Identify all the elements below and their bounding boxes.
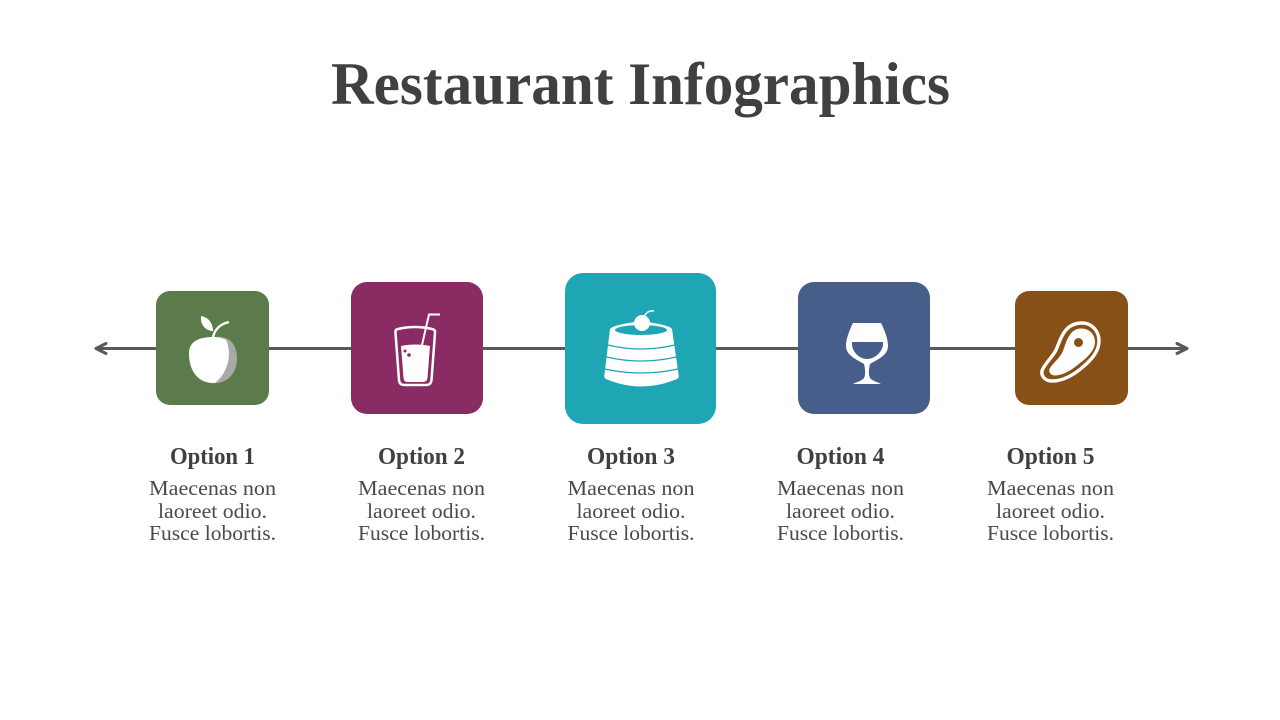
- text block: option 3: laoreet odio.: [576, 499, 686, 523]
- text block: option 3: Maecenas non: [568, 476, 695, 500]
- title: Restaurant Infographics: [331, 51, 950, 117]
- text block: option 4: [777, 444, 904, 545]
- text block: option 2: Fusce lobortis.: [358, 521, 485, 545]
- text block: option 2: laoreet odio.: [367, 499, 476, 523]
- text block: option 4: Option 4: [796, 444, 884, 470]
- text block: option 1: Fusce lobortis.: [149, 521, 276, 545]
- text block: option 4: laoreet odio.: [786, 499, 895, 523]
- text block: option 5: Maecenas non: [987, 476, 1114, 500]
- panel: option 4 tile: [798, 282, 930, 414]
- text block: option 3: Option 3: [587, 444, 675, 470]
- icon: steak: [1042, 323, 1099, 381]
- text block: option 1: Option 1: [170, 444, 255, 470]
- text block: option 1: [149, 444, 276, 545]
- text block: option 1: laoreet odio.: [158, 499, 267, 523]
- icon: cake with cherry: [604, 311, 679, 386]
- panel: option 1 tile: [156, 291, 269, 405]
- text block: option 2: Maecenas non: [358, 476, 485, 500]
- text block: option 2: Option 2: [378, 444, 465, 470]
- arrow: timeline: [96, 344, 1187, 354]
- text block: option 5: Option 5: [1006, 444, 1094, 470]
- text block: option 3: Fusce lobortis.: [568, 521, 694, 545]
- icon: apple: [189, 316, 237, 383]
- icon: drink glass with straw: [395, 314, 440, 385]
- icon: wine glass: [846, 323, 888, 384]
- text block: option 1: Maecenas non: [149, 476, 276, 500]
- text block: option 2: [358, 444, 485, 545]
- panel: option 3 tile: [565, 273, 716, 424]
- text block: option 4: Maecenas non: [777, 476, 904, 500]
- text block: option 4: Fusce lobortis.: [777, 521, 904, 545]
- text block: option 3: [568, 444, 695, 545]
- text block: option 5: Fusce lobortis.: [987, 521, 1114, 545]
- panel: option 5 tile: [1015, 291, 1128, 405]
- panel: option 2 tile: [351, 282, 483, 414]
- text block: option 5: laoreet odio.: [996, 499, 1105, 523]
- text block: option 5: [987, 444, 1114, 545]
